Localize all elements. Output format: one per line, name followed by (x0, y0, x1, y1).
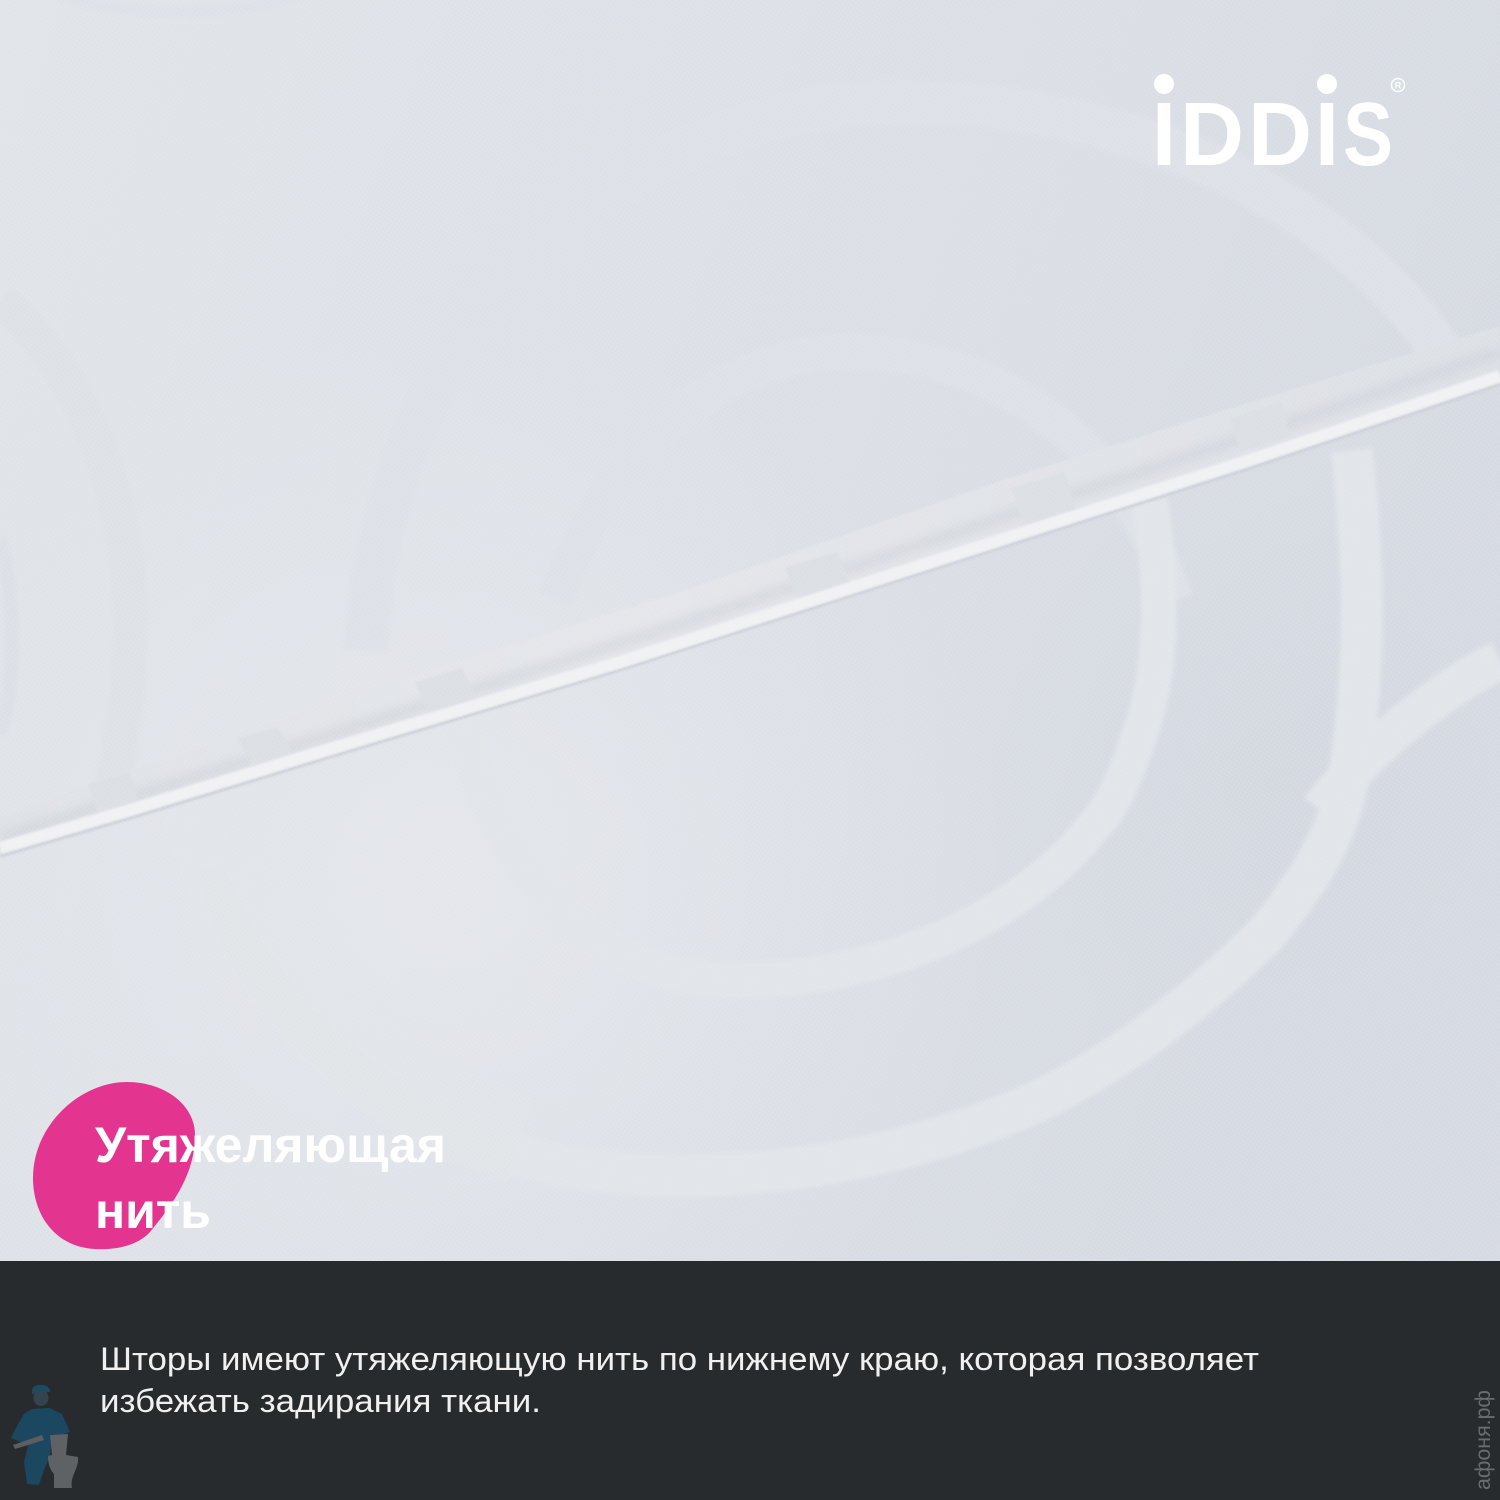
ring below fold (175, 450, 1362, 1176)
icon: plumber with toilet (11, 1385, 78, 1488)
weighted thread tabs (88, 402, 1290, 818)
logo: IDDIS: D (1180, 85, 1244, 185)
body text: избежать задирания ткани. (100, 1383, 541, 1419)
left ring (0, 300, 130, 790)
body text (100, 1341, 1259, 1419)
logo: IDDIS: S (1343, 85, 1393, 185)
heading: Утяжеляющая (95, 1117, 446, 1173)
logo: IDDIS (1152, 74, 1404, 185)
dark footer band (0, 1261, 1500, 1500)
white seam (0, 384, 1500, 856)
body text: Шторы имеют утяжеляющую нить по нижнему краю, которая позволяет (100, 1341, 1259, 1377)
heading (95, 1117, 446, 1239)
ring above fold (366, 102, 1450, 650)
watermark: афоня.рф (1472, 1390, 1495, 1490)
pink blob (33, 1082, 195, 1249)
logo: IDDIS: I (1152, 85, 1176, 185)
logo: IDDIS: I (1315, 85, 1339, 185)
jacquard circle pattern (0, 0, 1500, 1176)
fold of hem (0, 326, 1500, 858)
logo: IDDIS: R (1395, 80, 1402, 90)
fold shadow (0, 352, 1500, 838)
logo: IDDIS: D (1248, 85, 1312, 185)
heading: нить (95, 1183, 211, 1239)
